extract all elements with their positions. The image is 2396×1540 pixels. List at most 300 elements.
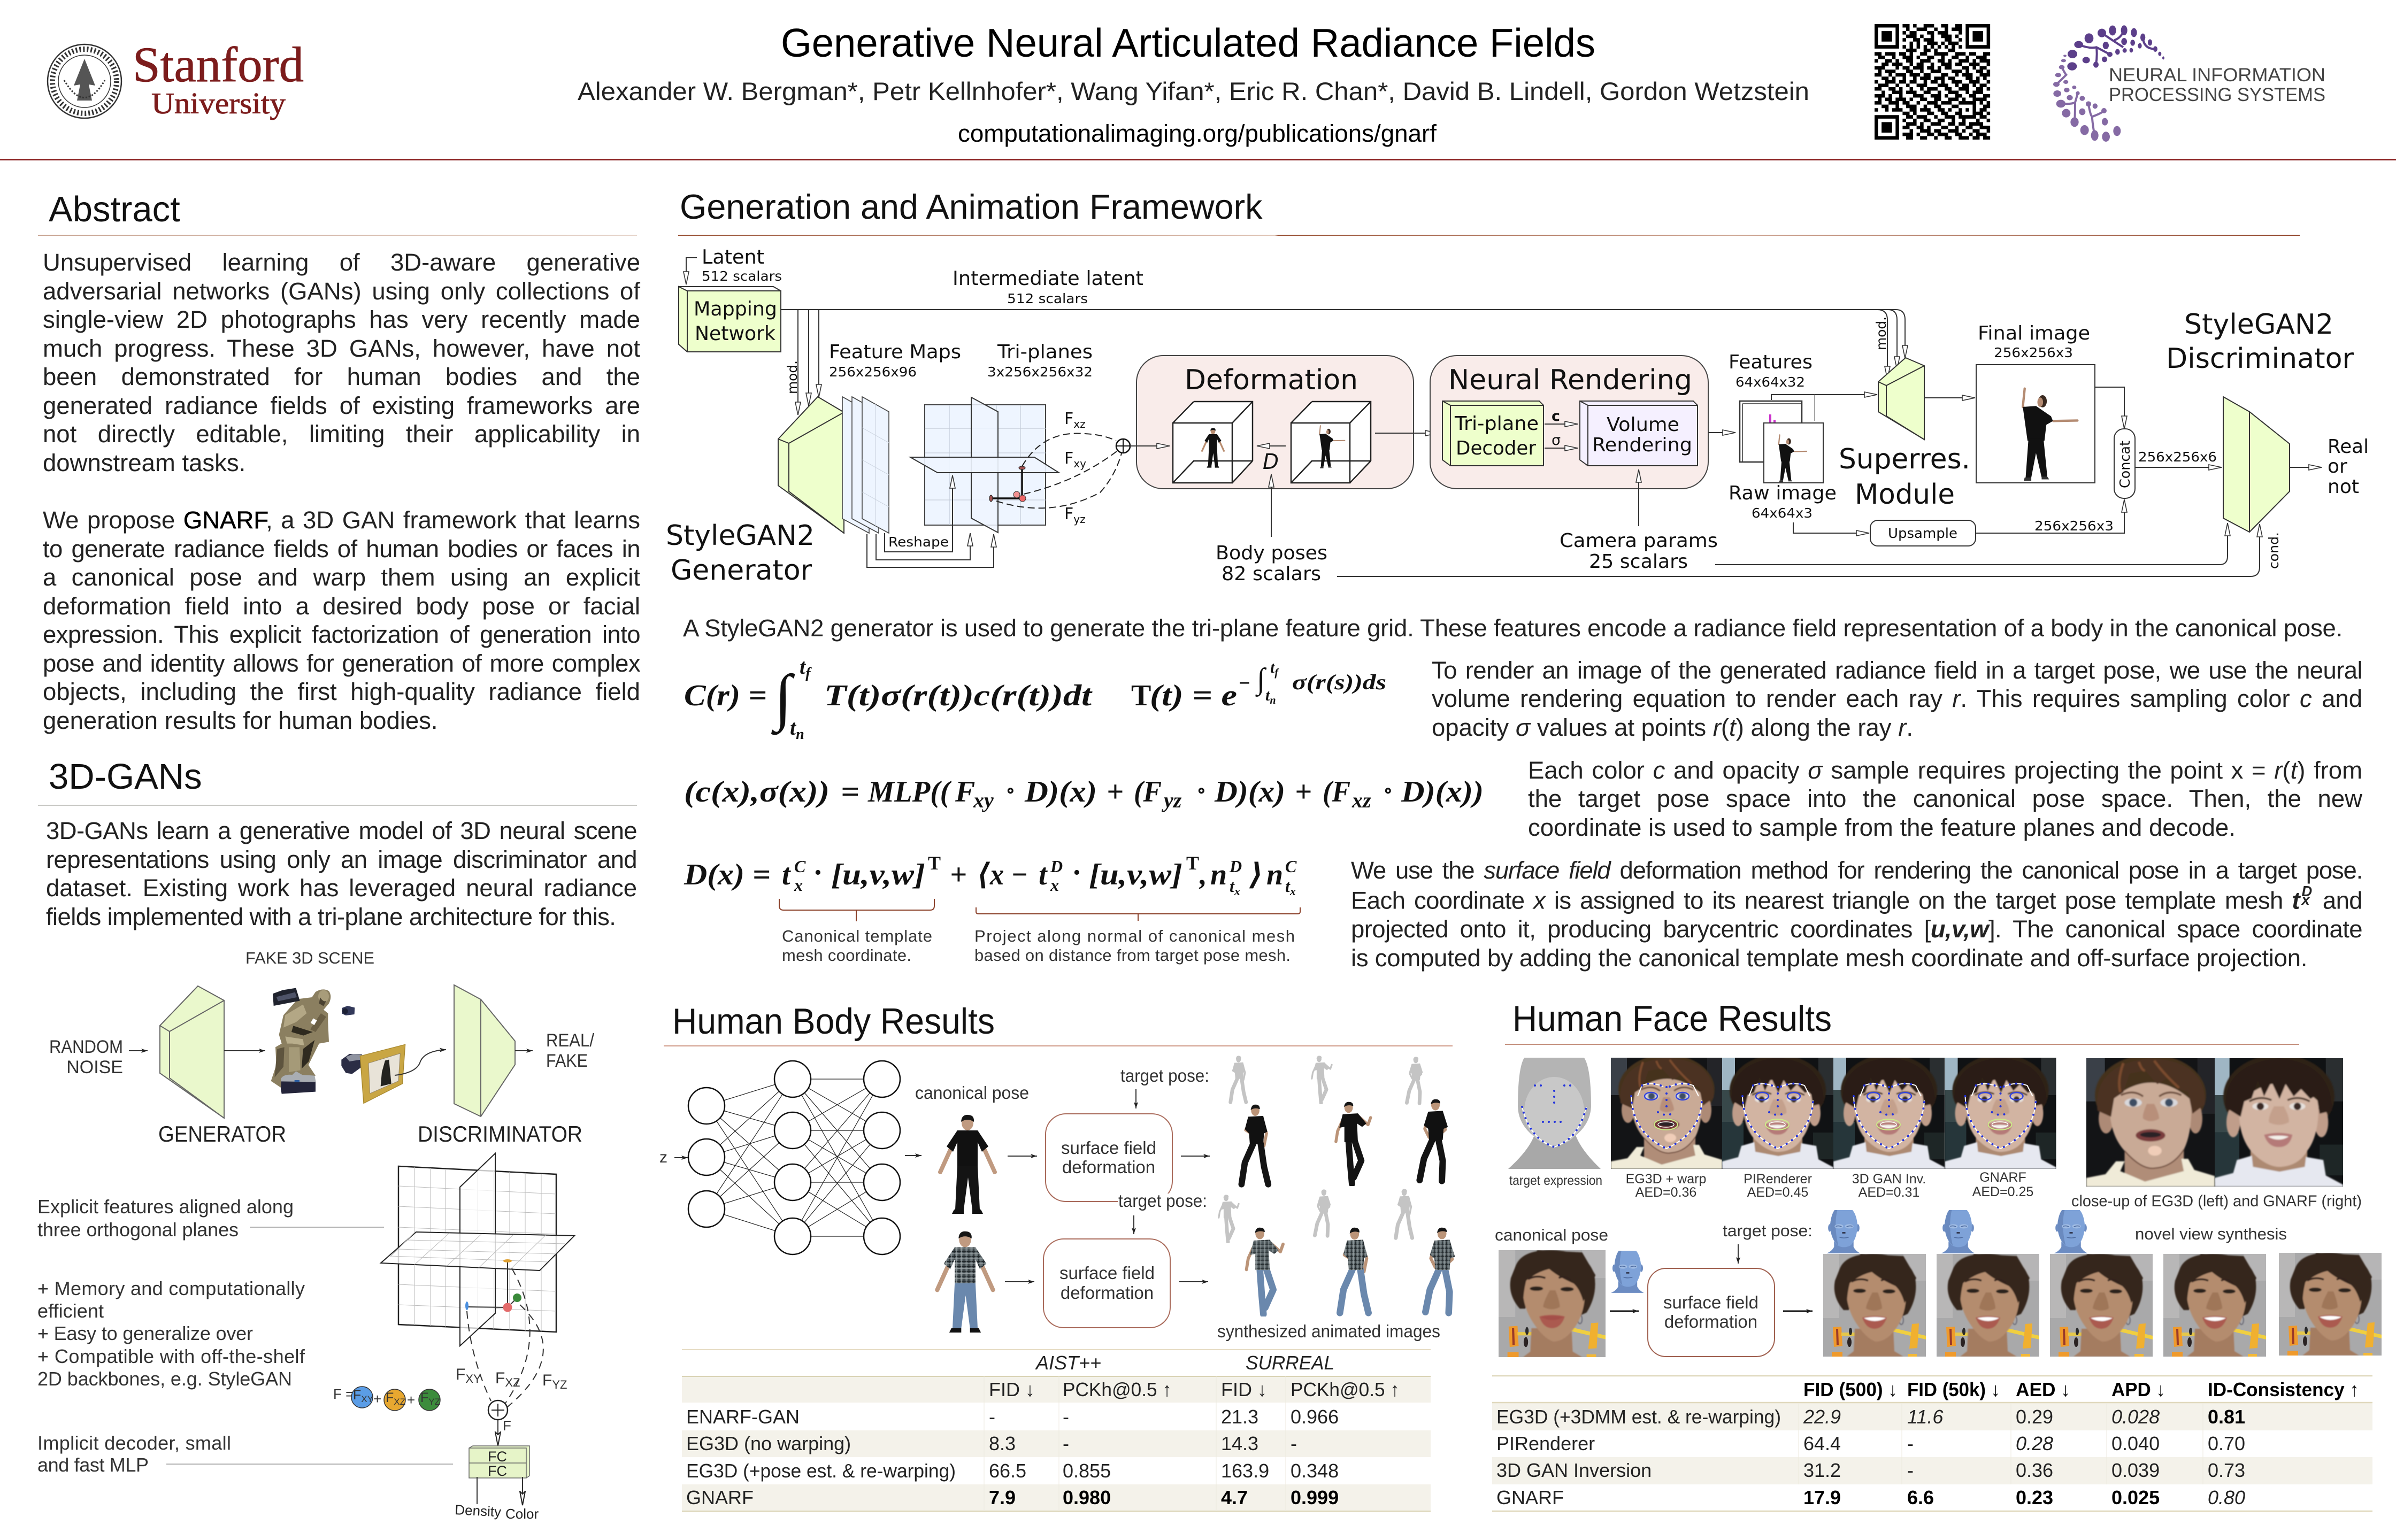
box: surface field deformation top: deformation: [1062, 1157, 1155, 1177]
final image: Final image: [1978, 322, 2090, 344]
text: tri-plane benefits: [37, 1277, 305, 1390]
text: tri-plane benefits: + Memory and computationally: [37, 1277, 305, 1299]
text: 3D-GANs description: fields implemented with a tri-plane architecture for this.: [46, 903, 616, 930]
logo: NeurIPS dots: [2053, 25, 2164, 142]
FC decoder block: [469, 1446, 529, 1479]
panel: deformation: Deformation: [1185, 364, 1358, 396]
box: surface field deformation: surface field: [1663, 1292, 1758, 1312]
equation: MLP color and opacity: MLP((: [867, 775, 952, 808]
text: implicit decoder: [37, 1432, 231, 1476]
heading: abstract: Abstract: [49, 189, 180, 229]
image: PIRenderer: [1722, 1054, 1833, 1169]
table: face results: 3D GAN Inversion: [1496, 1459, 1652, 1481]
table: body results: 66.5: [989, 1460, 1026, 1482]
feature sum formula: [333, 1386, 440, 1411]
box: surface field deformation: deformation: [1664, 1312, 1757, 1331]
StyleGAN2 discriminator block: [2223, 397, 2290, 532]
text: surface field explanation: D: [2302, 883, 2312, 899]
FC decoder block: FC: [488, 1449, 507, 1465]
feature labels Fxy Fxz Fyz: F: [456, 1366, 465, 1383]
feature sum formula: YZ: [428, 1397, 440, 1407]
tri-plane decoder block: [1442, 401, 1543, 466]
labels: Fxz Fxy Fyz: F: [1064, 505, 1073, 523]
label: body poses: 82 scalars: [1222, 563, 1321, 585]
equation: surface field deformation: ·: [814, 856, 821, 889]
c and sigma arrows: c: [1552, 408, 1560, 425]
label: novel view synthesis: novel view synthesis: [2135, 1225, 2287, 1243]
text: volume rendering explanation: [1432, 657, 2362, 741]
label: body poses: Body poses: [1216, 542, 1327, 564]
label: superres module: Superres.: [1839, 443, 1970, 475]
equation: surface field deformation: x: [1289, 884, 1296, 898]
box: surface field deformation bottom: surface field: [1059, 1263, 1155, 1283]
text: abstract second paragraph: generation results for human bodies.: [43, 707, 438, 734]
heading: framework: Generation and Animation Framework: [680, 187, 1262, 226]
label: superres module: [1839, 443, 1970, 511]
feature sum formula: F: [353, 1388, 361, 1403]
image: EG3D + warp: [1611, 1054, 1722, 1169]
arrow: noise to generator: [129, 1050, 148, 1051]
table: face results: ID-Consistency ↑: [2208, 1379, 2359, 1400]
table: body results: -: [989, 1406, 995, 1428]
latent input: Latent: [702, 245, 764, 268]
arrow: network to canonical: [905, 1155, 921, 1156]
feature labels Fxy Fxz Fyz: YZ: [552, 1378, 567, 1391]
text: abstract first paragraph: not directly editable, limiting their applicability in: [43, 420, 640, 448]
arrow: generator to scene: [224, 1050, 265, 1051]
labels: Fxz Fxy Fyz: F: [1064, 449, 1073, 468]
label: canonical pose: canonical pose: [915, 1083, 1029, 1103]
table: body results: 0.980: [1063, 1487, 1111, 1508]
equation: surface field deformation: D(x) =: [684, 858, 771, 891]
panel: 3D-GANs text: [38, 757, 637, 930]
volume rendering block: Rendering: [1592, 434, 1692, 456]
image: canonical face: [1499, 1250, 1606, 1357]
table: face results: 17.9: [1803, 1487, 1841, 1508]
equation: surface field deformation: x: [1050, 875, 1059, 895]
text: abstract second paragraph: [43, 506, 641, 734]
table: body results: [682, 1350, 1431, 1511]
upsample block and connector: Upsample: [1888, 526, 1957, 542]
feature sum formula: +: [373, 1391, 381, 1407]
table: body results: 0.999: [1291, 1487, 1339, 1508]
text: surface field explanation: projected onto it, producing barycentric coordinates [u,v,w]. The canonical space coordinate: [1351, 915, 2362, 943]
upsample block and connector: [1793, 499, 2124, 546]
caption: synthesized animated images: synthesized animated images: [1217, 1321, 1440, 1341]
text: surface field explanation: Each coordinate x is assigned to its nearest triangle on the target pose template mesh t and: [1351, 887, 2362, 914]
equation: transmittance: [1131, 659, 1386, 712]
feature labels Fxy Fxz Fyz: [456, 1366, 567, 1391]
table: body results: 4.7: [1221, 1487, 1248, 1508]
table: face results: FID (500) ↓: [1803, 1379, 1898, 1400]
equation: MLP color and opacity: ∘: [1005, 780, 1016, 801]
mapping network block: Mapping: [694, 297, 777, 320]
text: explicit features: [37, 1196, 294, 1241]
feature sum formula: F: [386, 1390, 394, 1405]
equation: volume rendering: ∫: [771, 662, 795, 735]
reshape connectors: Reshape: [888, 534, 949, 550]
equation: MLP color and opacity: D)(x)): [1401, 775, 1484, 808]
table: body results: -: [1063, 1433, 1069, 1454]
table: face results: FID (50k) ↓: [1907, 1379, 2000, 1400]
table: face results: 0.039: [2111, 1459, 2160, 1481]
table: body results: EG3D (no warping): [686, 1433, 851, 1454]
panel: human body results: [659, 1001, 1455, 1512]
cube: target pose body: [1291, 402, 1371, 483]
equation: surface field deformation: n: [1266, 858, 1283, 891]
table: face results: 0.040: [2111, 1433, 2160, 1454]
equation: surface field deformation: ⟨x −: [977, 858, 1028, 891]
text: abstract first paragraph: [43, 249, 641, 476]
equation: volume rendering: t: [800, 654, 805, 679]
table: face results: -: [1907, 1433, 1914, 1454]
generator shape: [160, 986, 224, 1118]
target pose top: target pose:: [1120, 1066, 1209, 1085]
caption: projection: Project along normal of canonical mesh: [974, 927, 1295, 945]
summation node: [488, 1400, 508, 1420]
table: body results: AIST++: [1035, 1352, 1101, 1374]
equation: volume rendering: t: [790, 715, 796, 740]
labels: Fxz Fxy Fyz: xy: [1073, 457, 1086, 470]
c and sigma arrows: σ: [1552, 432, 1561, 449]
text: abstract first paragraph: much progress. These 3D GANs, however, have not: [43, 335, 640, 361]
table: face results: EG3D (+3DMM est. & re-warping): [1496, 1406, 1781, 1428]
equation: MLP color and opacity: D)(x): [1024, 775, 1097, 808]
equation: surface field deformation: [684, 852, 1297, 898]
equation: surface field deformation: C: [794, 857, 806, 876]
equation: surface field deformation: x: [1234, 884, 1240, 898]
table: body results: PCKh@0.5 ↑: [1291, 1379, 1400, 1400]
text: explicit features: Explicit features aligned along: [37, 1196, 294, 1218]
table: face results: APD ↓: [2111, 1379, 2165, 1400]
equation: MLP color and opacity: +: [1107, 775, 1124, 808]
authors: Alexander W. Bergman*, Petr Kellnhofer*, Wang Yifan*, Eric R. Chan*, David B. Lindell, Gordon Wetzstein: [578, 77, 1809, 105]
equation: MLP color and opacity: D)(x): [1214, 775, 1285, 808]
captions: expression comparison: EG3D + warp: [1626, 1172, 1706, 1187]
equation: MLP color and opacity: [684, 775, 1484, 812]
heading: human face results: Human Face Results: [1512, 998, 1832, 1039]
arrow: sum to deformation: [1130, 445, 1170, 446]
text: abstract second paragraph: a canonical pose and warp them using an explicit: [43, 564, 640, 591]
text: volume rendering explanation: volume rendering equation to render each ray r. This requires sampling color c and: [1432, 685, 2362, 712]
text: abstract first paragraph: single-view 2D photographs has very recently made: [43, 306, 640, 333]
label: generator: GENERATOR: [158, 1121, 286, 1146]
tri-plane sampling rays: [989, 434, 1122, 508]
equation: volume rendering: C(r) =: [684, 679, 767, 712]
text: 3D-GANs description: [46, 817, 637, 930]
text: abstract second paragraph: We propose GNARF, a 3D GAN framework that learns: [43, 506, 640, 534]
caption: canonical template: Canonical template: [782, 927, 932, 945]
target pose meshes: [1219, 1056, 1423, 1242]
table: body results: 0.966: [1291, 1406, 1339, 1428]
equation: MLP color and opacity: xy: [973, 788, 994, 812]
camera params arrow and label: Camera params: [1560, 530, 1718, 552]
image: canonical body, plaid outfit: [937, 1231, 993, 1333]
conditioning lines: cond.: [2266, 532, 2282, 569]
superresolution block: [1878, 358, 1924, 440]
arrow: image to discriminator: [395, 1050, 446, 1075]
latent input: [686, 245, 782, 284]
table: face results: 0.70: [2208, 1433, 2245, 1454]
text: tri-plane benefits: efficient: [37, 1300, 104, 1322]
feature maps: [829, 341, 961, 533]
logo: NeurIPS wordmark: NEURAL INFORMATION: [2109, 65, 2325, 86]
table: face results: 22.9: [1803, 1406, 1841, 1428]
text: surface field explanation: is computed by adding the canonical template mesh coordinate and off-surface projection.: [1351, 944, 2307, 971]
c and sigma arrows: [1545, 408, 1578, 449]
table: face results: 0.81: [2208, 1406, 2245, 1428]
text: canonical sampling explanation: Each color c and opacity σ sample requires projecting the point x = r(t) from: [1528, 756, 2362, 784]
table: face results: PIRenderer: [1496, 1433, 1595, 1454]
equation: MLP color and opacity: (F: [1323, 775, 1350, 808]
captions: expression comparison: PIRenderer: [1744, 1172, 1812, 1187]
table: face results: -: [1907, 1459, 1914, 1481]
equation: surface field deformation: C: [1285, 857, 1297, 876]
feature labels Fxy Fxz Fyz: F: [542, 1372, 552, 1389]
image: target expression mesh head: [1508, 1058, 1601, 1169]
panel: neural rendering: [1430, 356, 1708, 489]
text: implicit decoder: Implicit decoder, small: [37, 1432, 231, 1454]
caption: close-up: close-up of EG3D (left) and GNARF (right): [2071, 1192, 2362, 1210]
box: surface field deformation bottom: deformation: [1061, 1283, 1154, 1303]
panel: poster header: [47, 20, 2325, 147]
equation: transmittance: t: [1270, 659, 1274, 676]
label: real or fake: [546, 1030, 595, 1071]
arrows into deformation: [1005, 1156, 1037, 1282]
intermediate latent bus: mod.: [1873, 317, 1889, 350]
label: real or fake: FAKE: [546, 1051, 588, 1071]
equation: transmittance: t: [1265, 687, 1270, 704]
features and raw image: 64x64x3: [1752, 505, 1813, 521]
table: body results: -: [1291, 1433, 1297, 1454]
equation: volume rendering: f: [805, 665, 812, 682]
captions: expression comparison: 3D GAN Inv.: [1852, 1172, 1926, 1187]
tri-plane sample points and rays: [465, 1259, 543, 1407]
text: 3D-GANs description: dataset. Existing work has leveraged neural radiance: [46, 874, 637, 902]
heading: human body results: Human Body Results: [672, 1001, 995, 1042]
text: 3D-GANs description: 3D-GANs learn a generative model of 3D neural scene: [46, 817, 637, 844]
equation: transmittance: ∫: [1255, 663, 1267, 697]
equation: MLP color and opacity: (c(x),σ(x)): [684, 775, 830, 808]
caption: canonical template: mesh coordinate.: [782, 946, 911, 965]
text: abstract first paragraph: Unsupervised learning of 3D-aware generative: [43, 249, 640, 276]
label: random noise: RANDOM: [49, 1037, 123, 1057]
captions: expression comparison: AED=0.31: [1859, 1185, 1919, 1200]
features and raw image: 64x64x32: [1735, 374, 1805, 390]
image: thinker statue with cameras: [271, 988, 405, 1103]
equation: MLP color and opacity: =: [841, 775, 859, 808]
arrow: deformation to rendering: [1375, 433, 1438, 434]
table: body results: PCKh@0.5 ↑: [1063, 1379, 1172, 1400]
features and raw image: Features: [1729, 351, 1813, 373]
text: tri-plane benefits: + Easy to generalize over: [37, 1322, 253, 1344]
label: z input: z: [659, 1149, 667, 1166]
arrow: concat to discriminator: 256x256x6: [2138, 449, 2217, 465]
image: close-up GNARF: [2215, 1054, 2343, 1187]
text: canonical sampling explanation: coordinate is used to sample from the feature planes and decode.: [1528, 814, 2236, 841]
table: body results: FID ↓: [989, 1379, 1035, 1400]
logo: Stanford University wordmark: University: [151, 87, 286, 120]
equation: transmittance: −: [1239, 672, 1250, 695]
text: surface field explanation: x: [2302, 891, 2309, 908]
feature labels Fxy Fxz Fyz: F: [495, 1369, 505, 1387]
arrow: features to superres: [1771, 395, 1877, 421]
volume rendering block: Volume: [1607, 414, 1679, 436]
summation node: [1116, 439, 1130, 453]
table: face results: [1492, 1376, 2372, 1511]
logo: Stanford seal: [48, 44, 121, 118]
tri-planes: Tri-planes: [997, 341, 1093, 363]
labels: density and color: Color: [505, 1506, 539, 1522]
image: GNARF: [1945, 1054, 2056, 1169]
panel: generation and animation framework: [666, 187, 2369, 587]
logo: Stanford University wordmark: Stanford: [133, 37, 304, 93]
box: surface field deformation: [1648, 1268, 1775, 1357]
equation: volume rendering: T(t)σ(r(t))c(r(t))dt: [824, 679, 1093, 712]
equation: surface field deformation: n: [1210, 858, 1227, 891]
equation: MLP color and opacity: +: [1295, 775, 1312, 808]
table: face results: AED ↓: [2016, 1379, 2070, 1400]
text: explicit features: three orthogonal planes: [37, 1219, 239, 1241]
table: face results: 0.73: [2208, 1459, 2245, 1481]
output arrow and label: [2290, 436, 2369, 498]
label: F: F: [503, 1418, 511, 1434]
latent input: 512 scalars: [702, 268, 782, 284]
table: face results: 0.025: [2111, 1487, 2160, 1508]
text: canonical sampling explanation: the target pose space into the canonical pose space. Then, the new: [1528, 785, 2362, 812]
table: body results: 14.3: [1221, 1433, 1258, 1454]
label: canonical pose: canonical pose: [1495, 1226, 1608, 1244]
feature sum formula: F =: [333, 1386, 354, 1402]
text: tri-plane benefits: + Compatible with off-the-shelf: [37, 1345, 305, 1367]
panel: abstract: [38, 189, 641, 734]
arrows: density and color outputs: [477, 1477, 523, 1505]
equation: MLP color and opacity: xz: [1351, 788, 1371, 812]
table: face results: 0.28: [2016, 1433, 2053, 1454]
brace: projection: [976, 907, 1300, 921]
brace: canonical template: [779, 899, 934, 921]
feature sum formula: F: [420, 1390, 428, 1405]
camera params arrow and label: 25 scalars: [1589, 551, 1688, 573]
table: body results: 7.9: [989, 1487, 1016, 1508]
table: body results: 163.9: [1221, 1460, 1269, 1482]
box: surface field deformation bottom: [1043, 1239, 1170, 1328]
panel: human face results: [1492, 998, 2382, 1512]
label: StyleGAN2 discriminator: [2166, 309, 2354, 375]
table: body results: SURREAL: [1246, 1352, 1334, 1374]
panel: equations: [684, 654, 1484, 965]
target pose bottom: target pose:: [1118, 1191, 1207, 1211]
equation: MLP color and opacity: (F: [1134, 775, 1162, 808]
equation: surface field deformation: t: [782, 858, 791, 891]
reshape connectors: [867, 475, 994, 567]
label: random noise: [49, 1037, 123, 1077]
equation: MLP color and opacity: ∘: [1383, 780, 1393, 801]
panel: deformation: [1136, 356, 1414, 489]
text: implicit decoder: and fast MLP: [37, 1454, 149, 1476]
table: face results: 0.29: [2016, 1406, 2053, 1428]
synthesized images: plaid outfit: [1247, 1228, 1455, 1314]
equation: transmittance: n: [1270, 695, 1276, 706]
text: tri-plane benefits: 2D backbones, e.g. StyleGAN: [37, 1368, 292, 1390]
features and raw image: Raw image: [1729, 482, 1837, 504]
heading: 3D-GANs: 3D-GANs: [49, 757, 202, 797]
tri-plane decoder block: Tri-plane: [1454, 413, 1539, 435]
table: body results: ENARF-GAN: [686, 1406, 800, 1428]
output arrow and label: or: [2328, 456, 2347, 478]
final image: 256x256x3: [1994, 345, 2073, 360]
table: body results: GNARF: [686, 1487, 754, 1508]
panel: 3D GAN diagram: [37, 949, 595, 1522]
label: superres module: Module: [1855, 479, 1955, 511]
feature sum formula: +: [407, 1392, 415, 1408]
QR code: [1875, 24, 1990, 140]
table: body results: 0.348: [1291, 1460, 1339, 1482]
table: face results: 0.23: [2016, 1487, 2053, 1508]
equation: surface field deformation: T: [928, 852, 941, 874]
equation: surface field deformation: D: [1050, 857, 1063, 876]
captions: expression comparison: AED=0.45: [1747, 1185, 1808, 1200]
text: abstract second paragraph: objects, including the first high-quality radiance field: [43, 678, 640, 705]
label: discriminator: DISCRIMINATOR: [418, 1121, 582, 1146]
text: canonical sampling explanation: [1528, 756, 2363, 841]
image: synthesized faces: [1823, 1253, 2382, 1357]
table: body results: 21.3: [1221, 1406, 1258, 1428]
labels: Fxz Fxy Fyz: xz: [1073, 418, 1086, 430]
text: abstract second paragraph: to generate radiance fields of human bodies or faces in: [43, 535, 640, 563]
equation: volume rendering: [684, 654, 1093, 743]
equation: transmittance: (t) = e: [1150, 679, 1237, 712]
target pose label and arrow: target pose:: [1723, 1221, 1813, 1240]
label: fake 3D scene: FAKE 3D SCENE: [245, 949, 374, 967]
equation: surface field deformation: t: [1230, 876, 1234, 896]
labels: Fxz Fxy Fyz: yz: [1073, 513, 1086, 526]
output arrow and label: Real: [2328, 436, 2369, 458]
caption: projection: [974, 927, 1295, 965]
table: face results: 11.6: [1907, 1406, 1944, 1428]
captions: expression comparison: GNARF: [1979, 1170, 2026, 1185]
label: real or fake: REAL/: [546, 1030, 595, 1051]
label: random noise: NOISE: [66, 1057, 123, 1077]
text: abstract second paragraph: expression. This explicit factorization of generation into: [43, 621, 640, 648]
deformation D arrow and label: D: [1263, 450, 1279, 474]
image: close-up EG3D: [2086, 1054, 2215, 1187]
tri-planes: 3x256x256x32: [987, 364, 1093, 380]
image: 3D GAN inversion: [1833, 1054, 1945, 1169]
equation: surface field deformation: D: [1229, 857, 1242, 876]
labels: density and color: [455, 1502, 539, 1522]
panel: neural rendering: Neural Rendering: [1448, 364, 1692, 396]
equation: surface field deformation: T: [1186, 852, 1199, 874]
table: face results: GNARF: [1496, 1487, 1564, 1508]
arrow: canonical to deformation: [1610, 1310, 1639, 1312]
equation: surface field deformation: +: [950, 858, 967, 891]
tri-plane decoder block: Decoder: [1456, 437, 1536, 459]
feature labels Fxy Fxz Fyz: XY: [465, 1372, 481, 1385]
image: canonical body, black outfit: [940, 1115, 995, 1214]
captions: expression comparison: AED=0.36: [1635, 1185, 1696, 1200]
intermediate latent bus: Intermediate latent: [953, 267, 1143, 290]
label: StyleGAN2 generator: [666, 520, 815, 587]
equation: transmittance: f: [1274, 667, 1279, 679]
label: StyleGAN2 discriminator: StyleGAN2: [2184, 309, 2333, 341]
logo: Stanford University wordmark: [133, 37, 304, 120]
labels: Fxz Fxy Fyz: F: [1064, 410, 1073, 428]
table: face results: 0.36: [2016, 1459, 2053, 1481]
box: surface field deformation top: surface field: [1061, 1138, 1156, 1158]
feature labels Fxy Fxz Fyz: XZ: [505, 1376, 520, 1389]
text: generator summary sentence: A StyleGAN2 generator is used to generate the tri-plane feature grid. These features encode a radiance field representation of a body in the canonical pose.: [683, 614, 2343, 642]
